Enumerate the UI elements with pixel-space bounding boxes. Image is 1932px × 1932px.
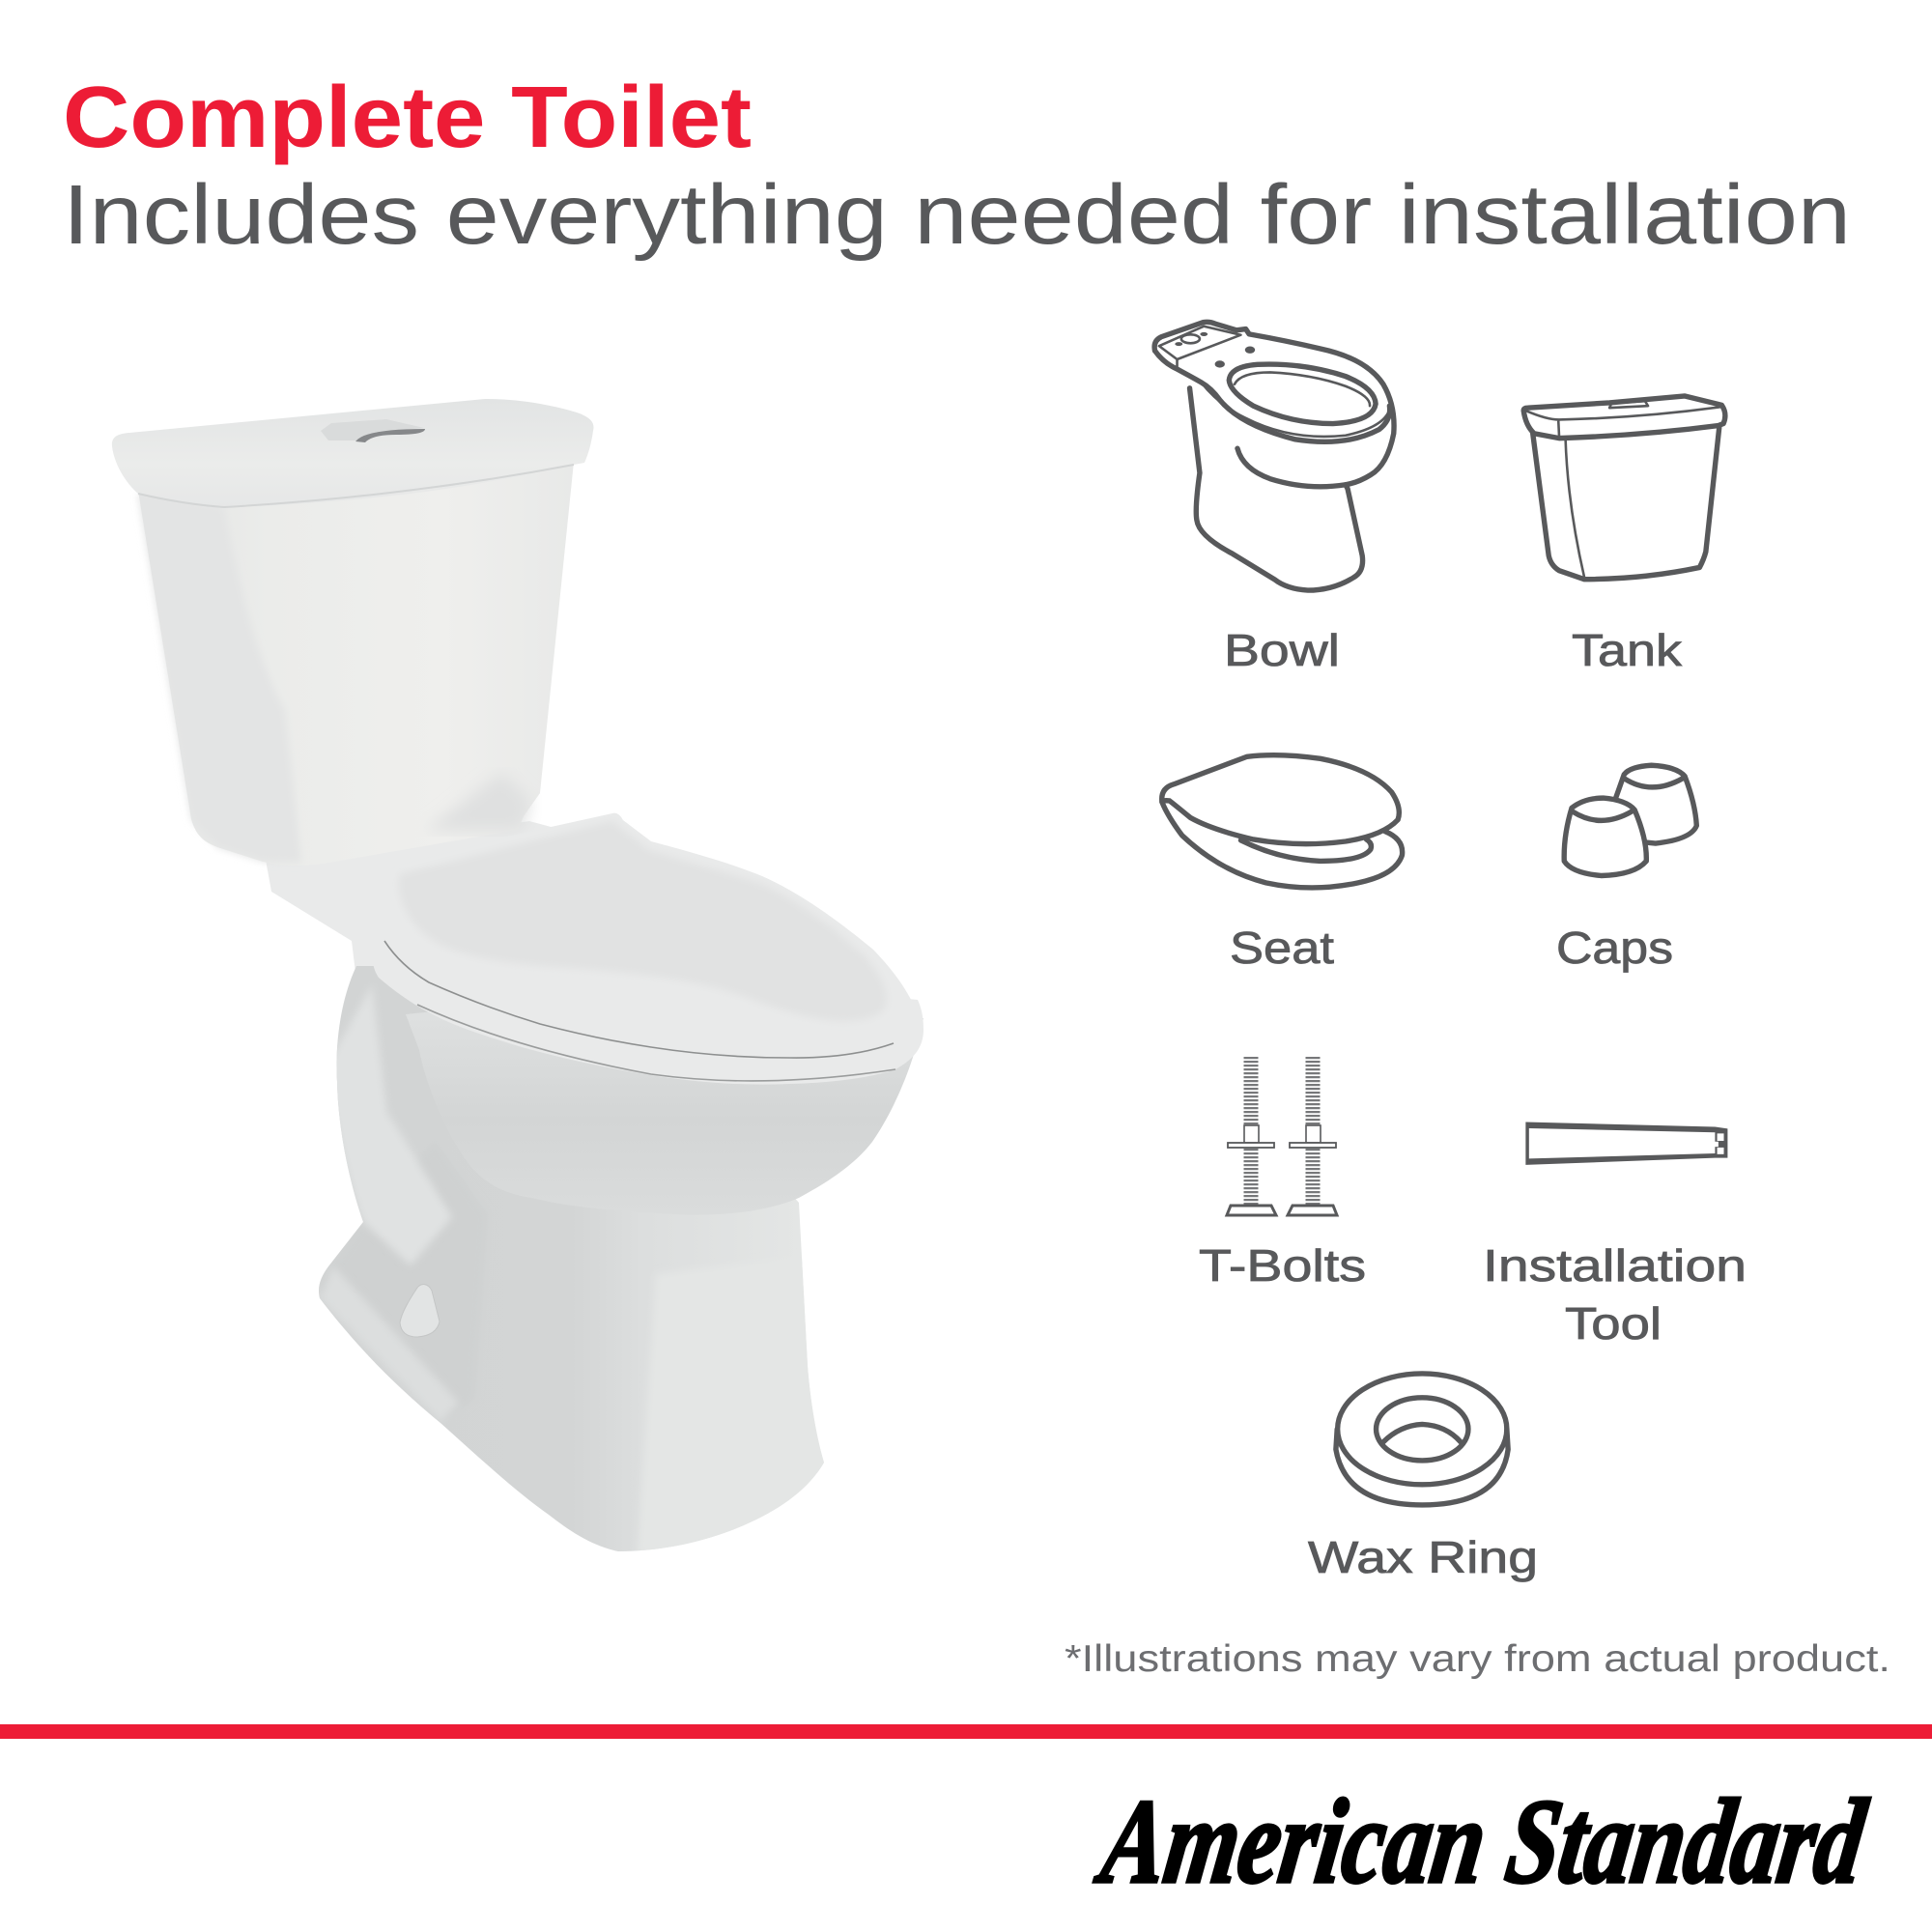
tank lid: [112, 399, 593, 507]
tank body facet: [138, 494, 301, 863]
part: bowl: [1154, 322, 1394, 675]
label: t-bolts: T-Bolts: [1199, 1240, 1366, 1291]
part: tank: [1523, 396, 1725, 675]
part: t-bolts: [1199, 1057, 1366, 1291]
toilet seat ring: [372, 952, 923, 1085]
heading block: [63, 70, 1851, 262]
icon: bowl: [1154, 322, 1394, 590]
parts grid: [1154, 322, 1747, 1582]
toilet bowl: [406, 1005, 923, 1215]
subtitle: Includes everything needed for installation: [63, 168, 1851, 262]
tank body: [138, 462, 574, 866]
toilet bolt cap: [400, 1285, 440, 1337]
toilet product illustration: [112, 399, 923, 1555]
part: seat: [1162, 755, 1403, 973]
part: installation tool: [1483, 1122, 1747, 1349]
seat and bowl gap line: [417, 1005, 895, 1081]
flush button: [321, 419, 425, 442]
toilet neck: [266, 821, 638, 1005]
footnote: *Illustrations may vary from actual product.: [1065, 1638, 1890, 1680]
part: caps: [1556, 765, 1696, 973]
toilet base shading: [320, 985, 831, 1555]
part: wax ring: [1308, 1374, 1538, 1582]
toilet base and pedestal: [319, 966, 824, 1551]
icon: t-bolts: [1227, 1057, 1337, 1215]
label: installation tool: Installation: [1483, 1240, 1747, 1291]
icon: caps: [1564, 765, 1696, 875]
label: seat: Seat: [1230, 923, 1334, 973]
label: installation tool: [1483, 1240, 1747, 1349]
label: wax ring: Wax Ring: [1308, 1532, 1538, 1582]
label: tank: Tank: [1572, 625, 1683, 675]
seat lid: [376, 813, 918, 1058]
tank lower shadow: [425, 773, 531, 831]
label: caps: Caps: [1556, 923, 1673, 973]
icon: seat: [1162, 755, 1403, 888]
title: Complete Toilet: [63, 70, 752, 166]
seat lid edge line: [384, 941, 894, 1058]
icon: wax ring: [1336, 1374, 1508, 1505]
seat lid panel: [399, 821, 887, 1021]
label: bowl: Bowl: [1224, 625, 1340, 675]
icon: tank: [1523, 396, 1725, 580]
icon: installation tool: [1525, 1122, 1727, 1165]
tank lid edge: [138, 465, 574, 507]
red divider bar: [0, 1724, 1932, 1739]
label: installation tool: Tool: [1565, 1298, 1662, 1349]
